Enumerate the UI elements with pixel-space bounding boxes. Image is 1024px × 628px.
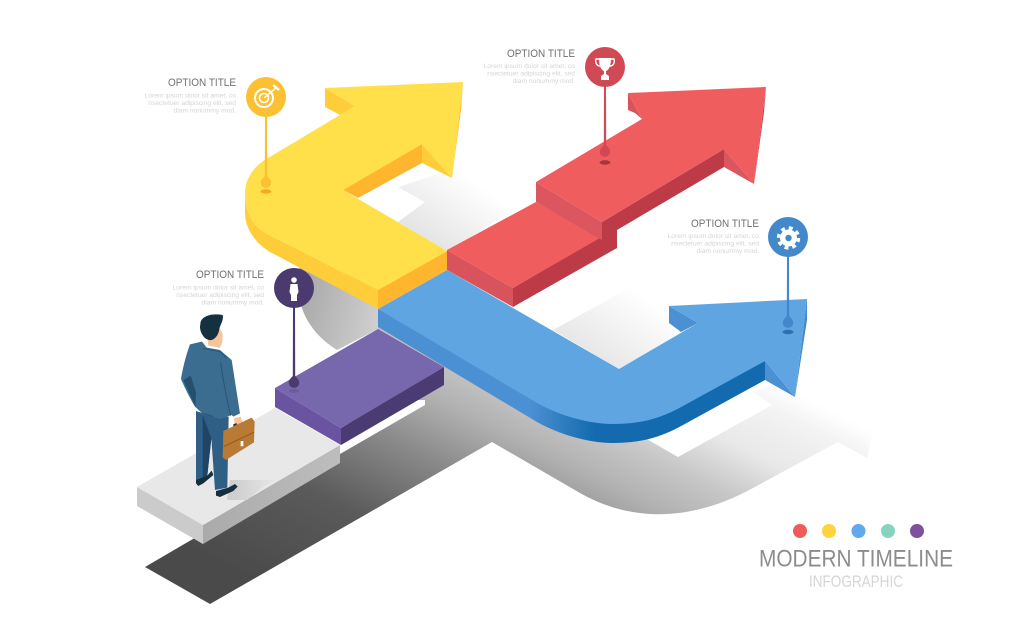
callout: red option: Lorem ipsum dolor sit amet, co — [484, 63, 575, 70]
icon: trophy — [596, 58, 614, 80]
ground shadow: main path — [145, 320, 877, 604]
starting platform — [137, 408, 340, 544]
callout: blue option — [668, 218, 759, 255]
icon: gear — [778, 228, 798, 248]
briefcase handle — [233, 423, 237, 429]
callout: red option: OPTION TITLE — [507, 48, 575, 60]
ground shadow: left curve — [298, 265, 378, 350]
jacket seam — [203, 348, 231, 417]
briefcase clasp — [241, 441, 243, 446]
ground shadow: white gap under purple step — [336, 400, 425, 454]
purple step — [275, 329, 444, 445]
front shoe — [216, 484, 238, 497]
yellow arrow — [245, 82, 463, 309]
icon: target — [255, 85, 279, 107]
jacket — [181, 342, 240, 419]
hand — [234, 417, 243, 427]
callout: purple option: Lorem ipsum dolor sit amet, co — [173, 284, 264, 292]
neck and face — [207, 328, 223, 348]
callout: yellow option: nsectetuer adipiscing elit, sed — [148, 100, 236, 107]
callout: yellow option: Lorem ipsum dolor sit amet, co — [145, 92, 236, 100]
callout: blue option: OPTION TITLE — [691, 218, 759, 230]
pin: red trophy — [585, 47, 625, 165]
legend colour dots — [793, 524, 924, 538]
briefcase flap line — [223, 432, 254, 447]
callout: blue option: nsectetuer adipiscing elit, sed — [671, 240, 759, 248]
pin: blue gear — [768, 217, 808, 334]
businessman with briefcase — [181, 314, 255, 497]
subtitle: INFOGRAPHIC — [809, 573, 903, 591]
ground shadow: upper area behind red arrow — [398, 170, 545, 252]
hair — [200, 314, 223, 340]
callout: purple option: diam nonummy mod. — [202, 300, 264, 306]
trousers — [196, 411, 229, 490]
red arrow — [447, 87, 766, 307]
callout: purple option: nsectetuer adipiscing elit, sed — [176, 292, 264, 299]
far arm shadow — [183, 376, 196, 406]
callout: yellow option — [145, 77, 236, 114]
callout: yellow option: OPTION TITLE — [168, 77, 236, 89]
pin: yellow target — [246, 77, 286, 194]
callout: blue option: Lorem ipsum dolor sit amet, co — [668, 233, 759, 240]
callout: red option: diam nonummy mod. — [513, 78, 575, 85]
briefcase — [223, 418, 255, 460]
blue arrow — [378, 270, 807, 443]
callout: red option — [484, 48, 575, 85]
icon: person — [290, 277, 298, 301]
pin: purple person — [274, 268, 314, 393]
callout: red option: nsectetuer adipiscing elit, sed — [487, 70, 575, 78]
shirt collar — [202, 341, 220, 350]
ground shadow: area behind blue arrow — [553, 282, 705, 369]
rear shoe — [196, 471, 213, 486]
callout: purple option — [173, 269, 264, 306]
callout: yellow option: diam nonummy mod. — [174, 108, 236, 114]
callout: purple option: OPTION TITLE — [196, 269, 264, 281]
trouser shading — [203, 415, 211, 478]
callout: blue option: diam nonummy mod. — [697, 248, 759, 255]
title: MODERN TIMELINE — [759, 546, 953, 572]
